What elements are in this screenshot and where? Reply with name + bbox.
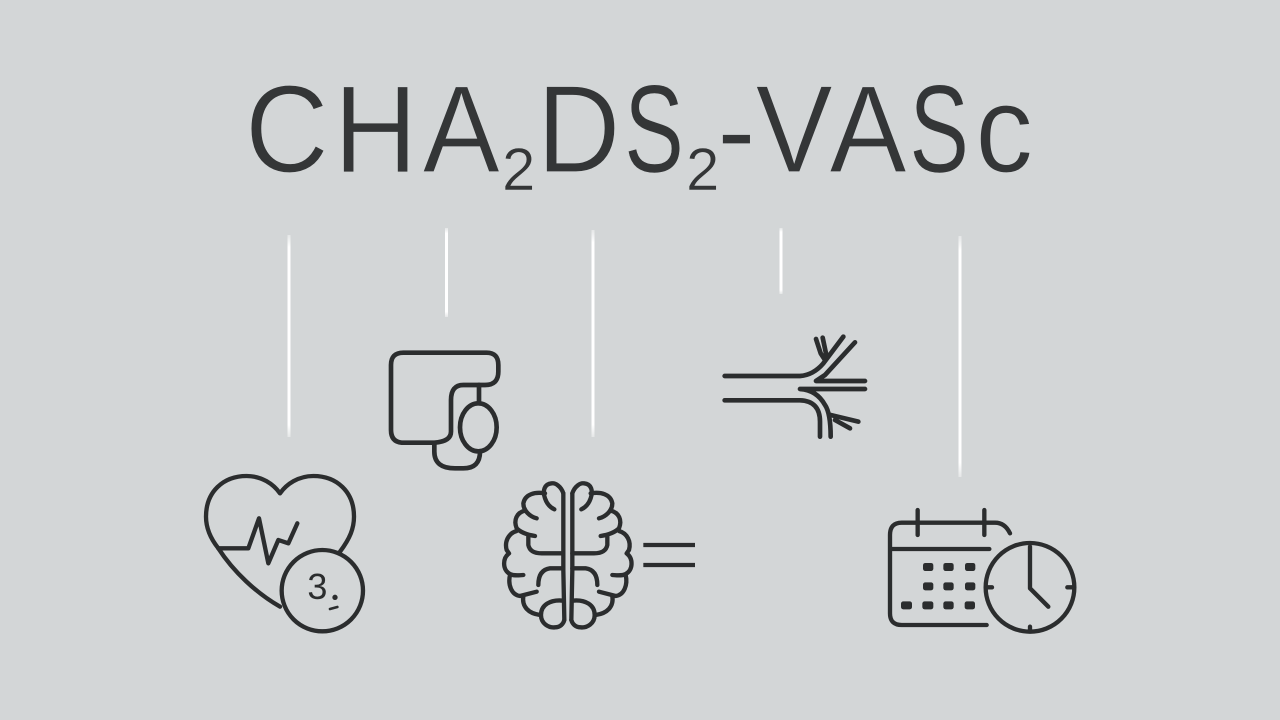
connector line 4 [780,228,782,294]
brain right hemisphere [571,483,632,627]
icon: kidney-like organ outline [391,353,498,468]
clock [986,543,1074,632]
title: S [909,60,969,198]
connector line 3 [592,230,594,437]
icon: heart with pulse and score badge: 3 [307,566,327,607]
title: CHA [245,60,500,199]
calendar [890,510,1010,625]
title: 2 [502,136,535,203]
title: c [975,60,1033,199]
icon: heart with pulse and score badge [206,476,363,631]
icon: calendar with clock [890,510,1074,632]
connector line 2 [445,228,448,317]
icon: brain with equals bars [504,483,695,627]
connector line 5 [958,236,962,477]
title: 2 [686,136,719,203]
title: -VA [717,60,907,199]
icon: branching blood vessels [725,337,865,437]
brain left hemisphere [504,483,564,627]
title [245,60,1033,203]
title: S [624,60,684,198]
title: D [537,60,620,199]
connector line 1 [288,235,290,437]
